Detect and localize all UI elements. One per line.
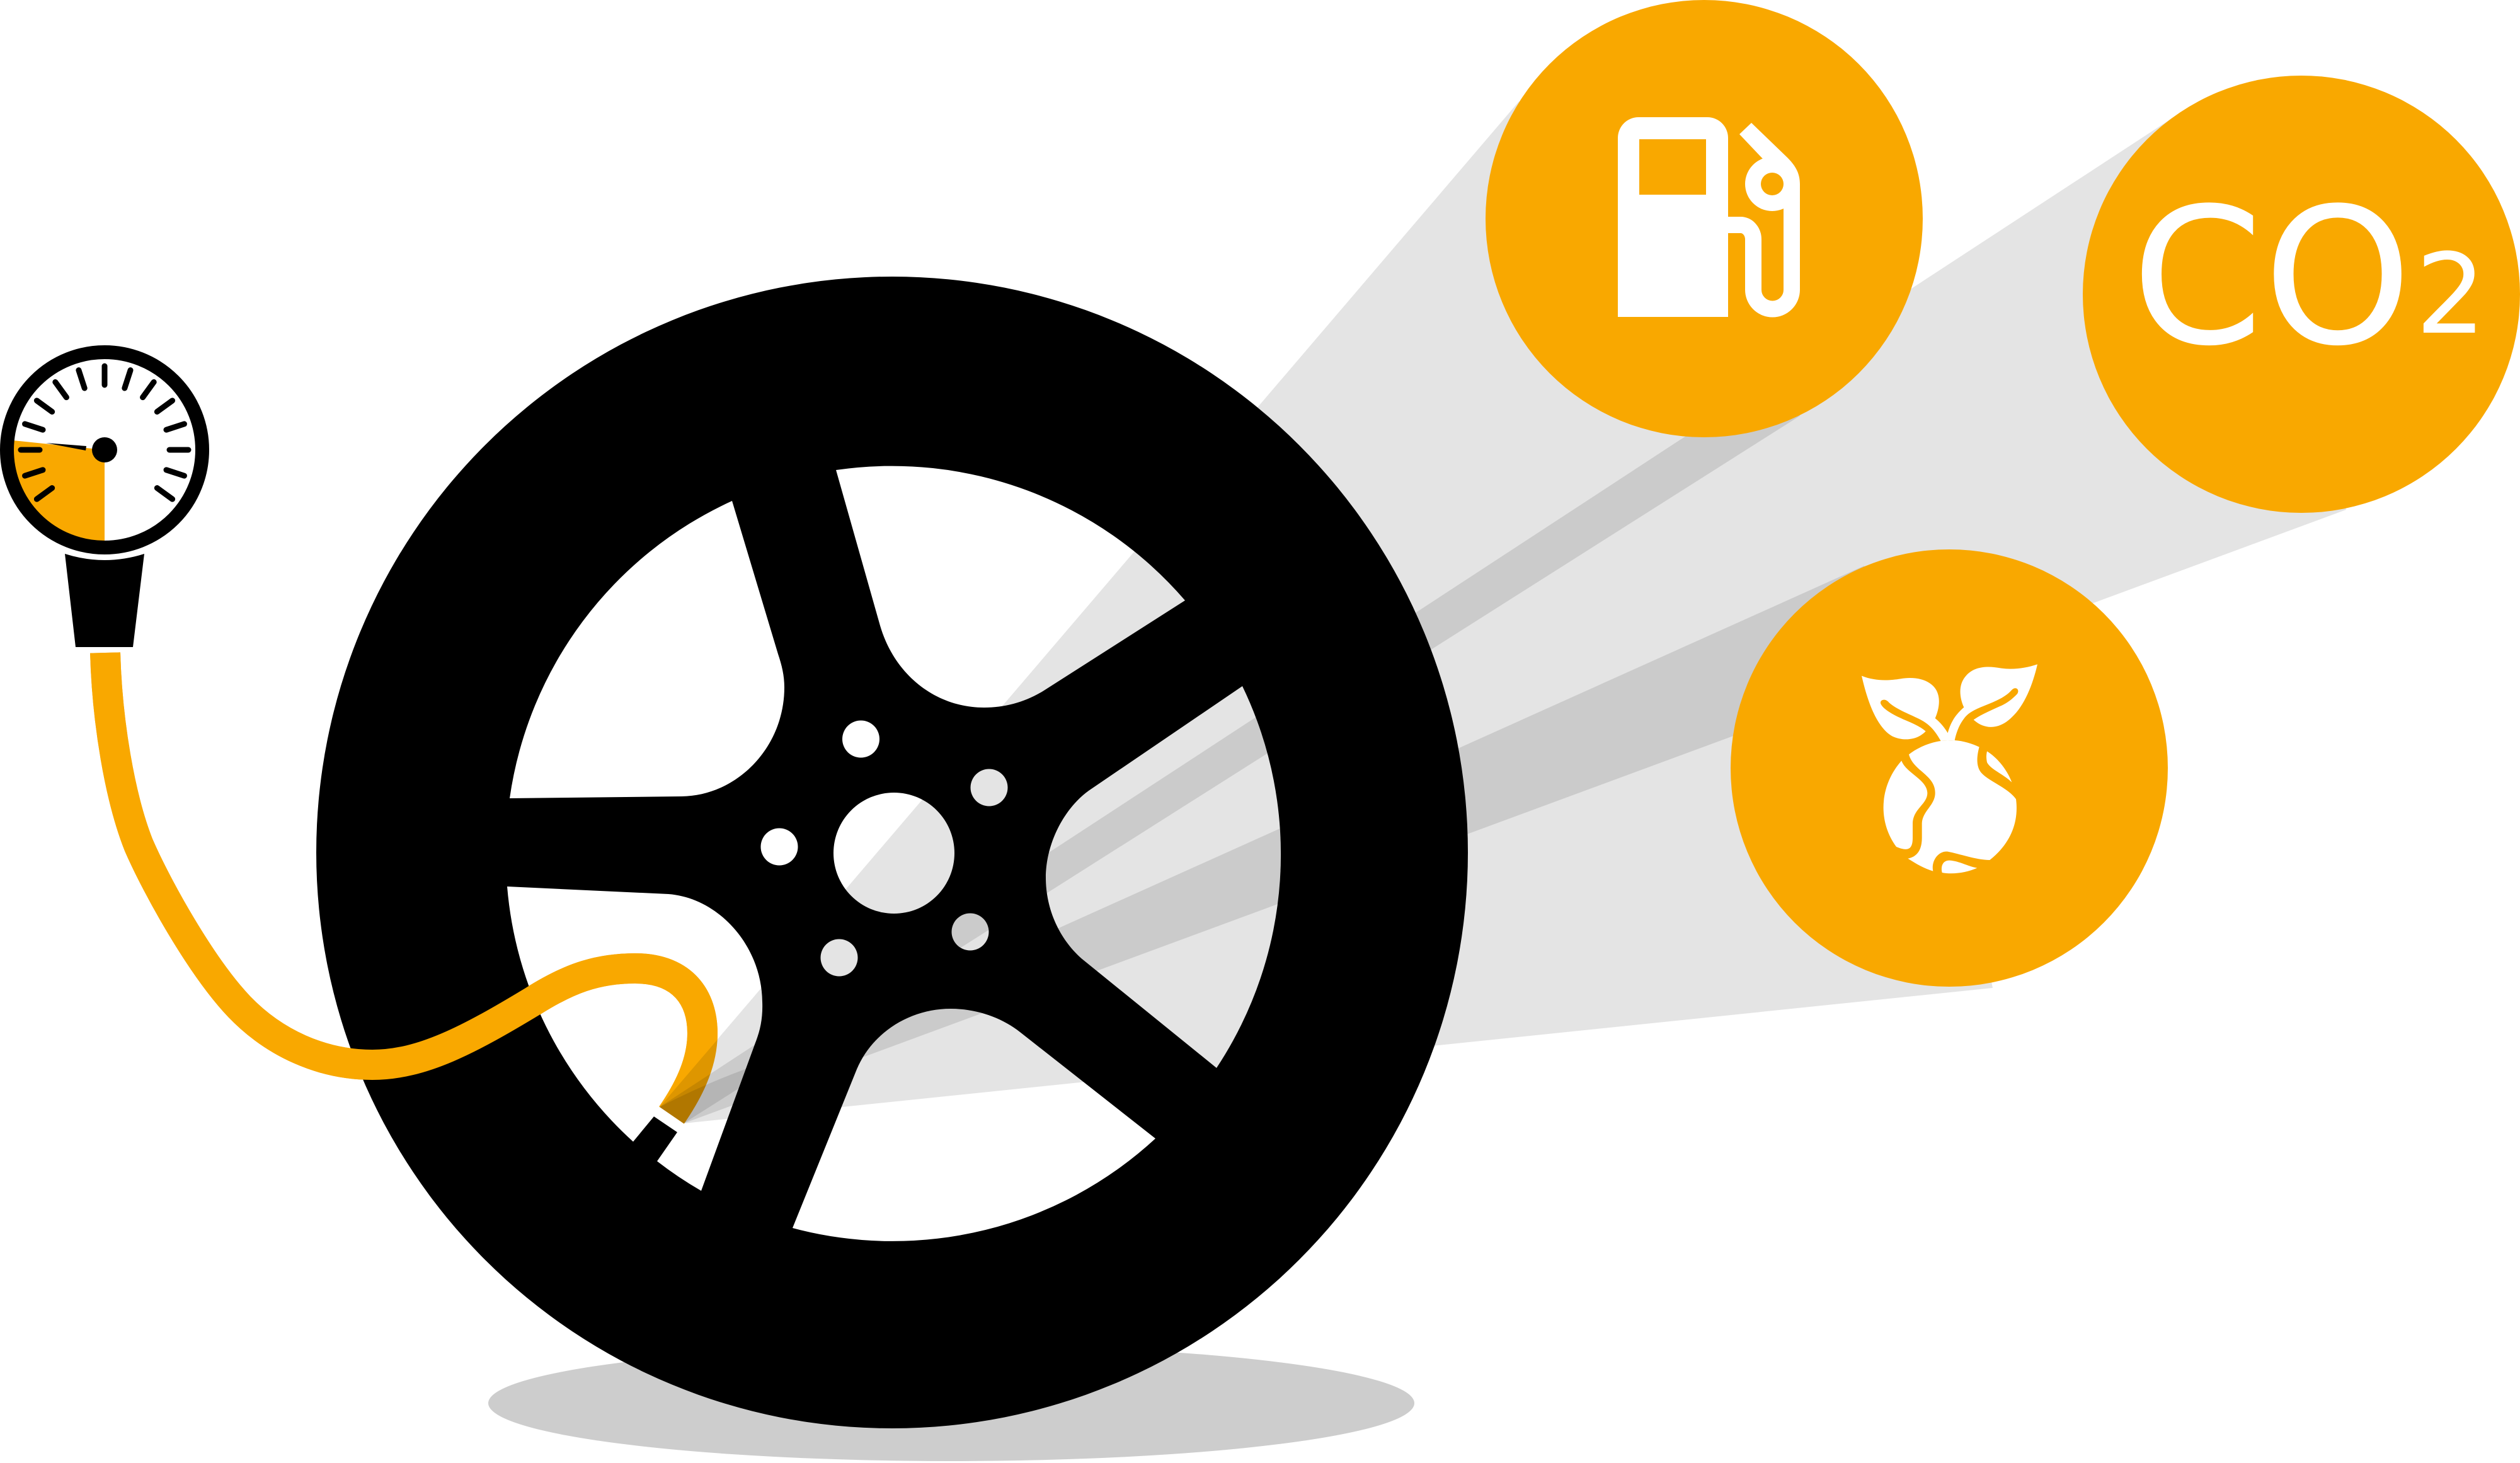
tyre and wheel rim with openings [316,277,1468,1428]
gauge dial face [10,355,199,544]
icon: globe with sprouting leaves [1862,664,2037,873]
cone to CO2 circle [660,120,2346,1123]
CO2 label: CO [2131,168,2412,387]
cone to environment circle [660,566,1993,1123]
environment effect circle [1731,549,2168,987]
light cones from valve to the three effects [660,101,2346,1123]
pressure gauge [7,352,202,647]
orange air hose over tyre [105,653,702,1115]
ground shadow under tyre [488,1345,1414,1461]
gauge stem [65,554,144,647]
cone to fuel circle [660,101,1800,1123]
gauge ring [7,352,202,548]
gauge needle [46,443,86,450]
CO2 label: 2 [2415,230,2486,359]
low pressure orange sector [13,440,105,542]
gauge hub [92,437,117,462]
hose tip beneath light cones [105,653,702,1115]
gauge tick marks [21,366,188,499]
fuel effect circle [1486,0,1923,437]
CO2 effect circle [2083,76,2520,513]
icon: fuel pump [1618,117,1800,317]
